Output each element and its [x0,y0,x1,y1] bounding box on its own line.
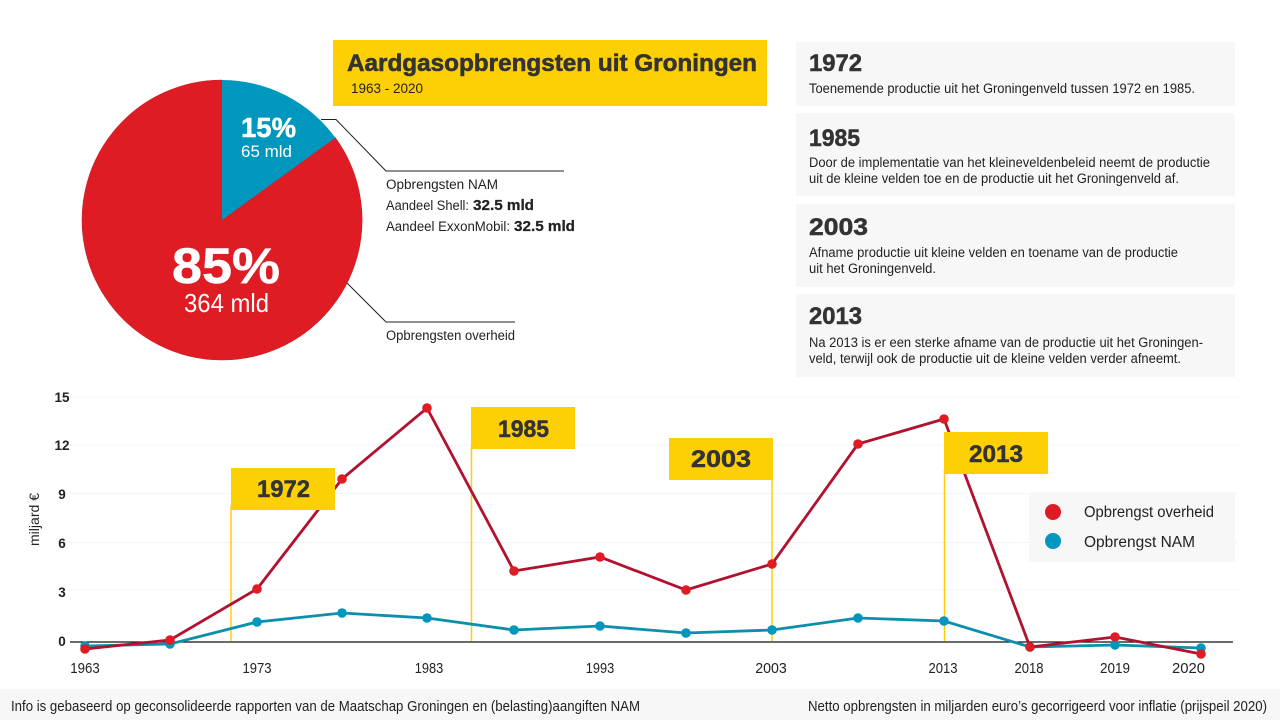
x axis labels: 1963 [70,660,100,677]
label: 65 mld: 65 mld [241,142,292,161]
line chart [26,390,1238,677]
panel: 2003: uit het Groningenveld. [809,261,936,276]
marker stems [231,445,944,641]
series: Opbrengst overheid [80,403,1206,659]
label: 364 mld: 364 mld [184,288,269,318]
flag: 1972 [231,468,335,510]
pie slice: NAM 15% [222,80,335,220]
y axis labels: 15 [54,390,70,405]
y axis labels: 0 [58,634,66,649]
flag: 2013 [944,432,1048,474]
panel: 1985: Door de implementatie van het kleineveldenbeleid neemt de productie [809,155,1210,170]
y axis labels: 3 [58,585,66,600]
x axis labels: 2019 [1100,660,1130,677]
panel: 1985: 1985 [809,125,860,152]
baseline [70,641,1233,643]
callout: NAM [321,120,575,235]
x axis labels: 1993 [586,660,614,677]
y axis title: miljard € [26,493,42,546]
flag: 1972: 1972 [257,476,310,503]
panel: 1985 [796,113,1235,196]
callout: NAM: 32.5 mld [473,198,534,214]
flag: 1985: 1985 [498,416,549,443]
panel: 2013 [796,294,1235,377]
callout: NAM: Opbrengsten NAM [386,177,498,192]
callout: NAM: Aandeel Shell: [386,198,469,213]
callout: NAM: 32.5 mld [514,219,575,235]
x axis labels: 2018 [1014,660,1044,677]
panel: 2013: 2013 [809,303,862,330]
panel: 2013: veld, terwijl ook de productie uit de kleine velden verder afneemt. [809,351,1181,366]
panel: 1972: Toenemende productie uit het Groningenveld tussen 1972 en 1985. [809,81,1195,96]
panel: 2013: Na 2013 is er een sterke afname van de productie uit het Groningen- [809,335,1203,350]
pie chart [82,80,362,360]
label: 85%: 85% [172,238,280,294]
footer note left: Info is gebaseerd op geconsolideerde rapporten van de Maatschap Groningen en (belasting)aangiften NAM [11,699,640,715]
panel: 2003: Afname productie uit kleine velden en toename van de productie [809,245,1178,260]
callout: NAM: Aandeel ExxonMobil: [386,219,510,234]
flag: 2003: 2003 [691,446,751,473]
panel: 1972: 1972 [809,50,862,77]
panel: 1985: uit de kleine velden toe en de productie uit het Groningenveld af. [809,171,1179,186]
x axis labels: 1983 [415,660,443,677]
legend item: NAM: Opbrengst NAM [1084,534,1195,551]
flag: 2013: 2013 [969,441,1023,468]
y axis labels: 12 [54,438,70,453]
x axis labels [70,660,1205,677]
legend [1029,492,1235,562]
x axis labels: 2013 [928,660,958,677]
flag: 2003 [669,438,773,480]
y axis labels: 6 [58,536,66,551]
y axis labels [54,390,70,649]
footer bar [0,689,1280,720]
x axis labels: 2003 [755,660,787,677]
title: Aardgasopbrengsten uit Groningen [347,50,757,77]
y axis labels: 9 [58,487,66,502]
panel: 2003 [796,204,1235,287]
title block [333,40,767,106]
pie slice: overheid 85% [82,80,362,360]
legend item: overheid: Opbrengst overheid [1084,504,1214,521]
flag: 1985 [471,407,575,449]
callout: overheid: Opbrengsten overheid [386,328,515,343]
series: Opbrengst NAM [80,608,1206,653]
legend item: NAM [1045,533,1195,551]
callout: overheid [347,283,515,343]
x axis labels: 2020 [1172,660,1205,677]
label: 15%: 15% [241,112,296,143]
subtitle: 1963 - 2020 [351,80,423,96]
panel: 2003: 2003 [809,214,868,241]
x axis labels: 1973 [242,660,272,677]
panel: 1972 [796,42,1235,106]
